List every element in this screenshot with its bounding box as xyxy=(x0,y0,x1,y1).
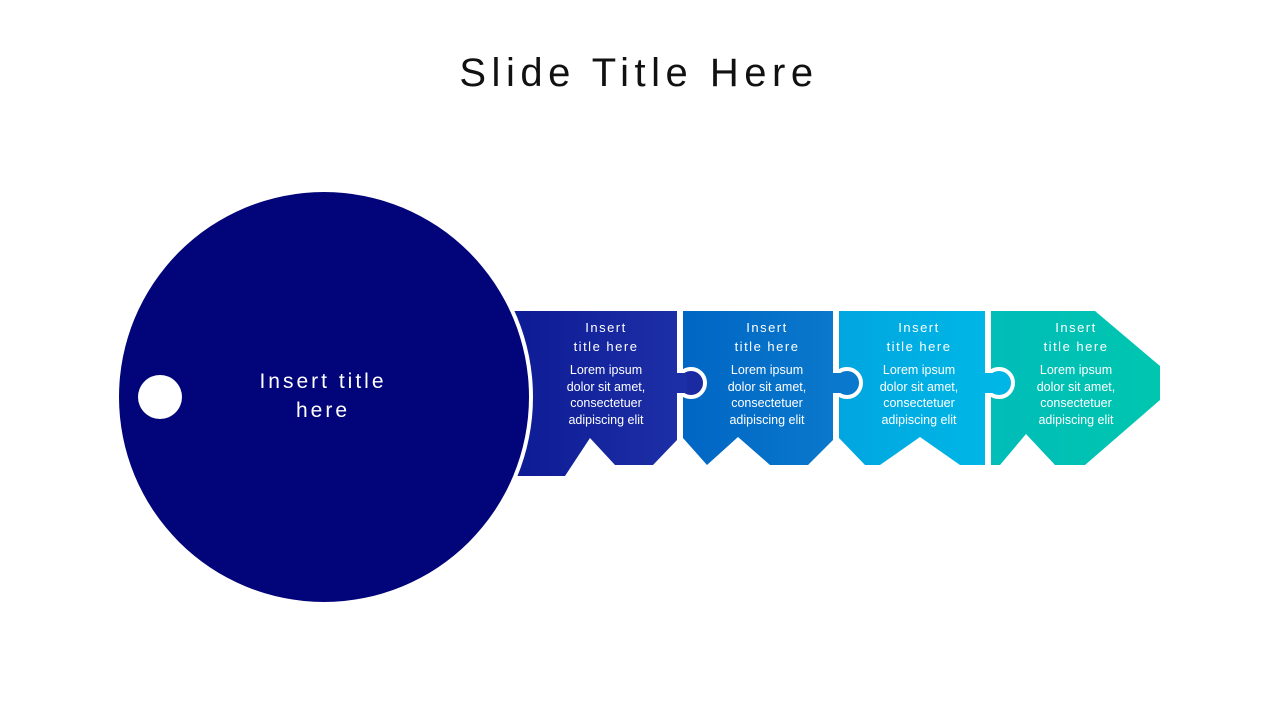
key head circle: here xyxy=(296,399,350,422)
text piece 4: Lorem ipsum xyxy=(1040,363,1112,377)
text piece 4: title here xyxy=(1044,339,1108,354)
text piece 4 xyxy=(1037,320,1115,427)
text piece 1: adipiscing elit xyxy=(568,413,644,427)
text piece 4: Insert xyxy=(1055,320,1097,335)
text piece 2: adipiscing elit xyxy=(729,413,805,427)
text piece 1: Lorem ipsum xyxy=(570,363,642,377)
text piece 2: consectetuer xyxy=(731,396,803,410)
text piece 2: title here xyxy=(735,339,799,354)
text piece 3: title here xyxy=(887,339,951,354)
text piece 1: consectetuer xyxy=(570,396,642,410)
text piece 1: Insert xyxy=(585,320,627,335)
text piece 3 xyxy=(880,320,958,427)
text piece 3: consectetuer xyxy=(883,396,955,410)
text piece 4: dolor sit amet, xyxy=(1037,380,1115,394)
key hole xyxy=(138,375,182,419)
text piece 4: consectetuer xyxy=(1040,396,1112,410)
text piece 3: Lorem ipsum xyxy=(883,363,955,377)
piece 1 xyxy=(505,311,677,476)
text piece 4: adipiscing elit xyxy=(1038,413,1114,427)
text piece 1: dolor sit amet, xyxy=(567,380,645,394)
piece 4 xyxy=(983,311,1160,465)
text piece 1 xyxy=(567,320,645,427)
text piece 2: Lorem ipsum xyxy=(731,363,803,377)
text piece 1: title here xyxy=(574,339,638,354)
text piece 3: Insert xyxy=(898,320,940,335)
text piece 2 xyxy=(728,320,806,427)
text piece 2: Insert xyxy=(746,320,788,335)
text piece 3: adipiscing elit xyxy=(881,413,957,427)
text piece 3: dolor sit amet, xyxy=(880,380,958,394)
piece 2 xyxy=(675,311,833,465)
knob 1 xyxy=(675,369,705,397)
key head circle xyxy=(115,188,533,606)
piece 3 xyxy=(831,311,985,465)
text piece 2: dolor sit amet, xyxy=(728,380,806,394)
knob 2 xyxy=(831,369,861,397)
title: Slide Title Here xyxy=(459,51,819,95)
circle text: Insert title xyxy=(259,370,387,393)
knob 3 xyxy=(983,369,1013,397)
